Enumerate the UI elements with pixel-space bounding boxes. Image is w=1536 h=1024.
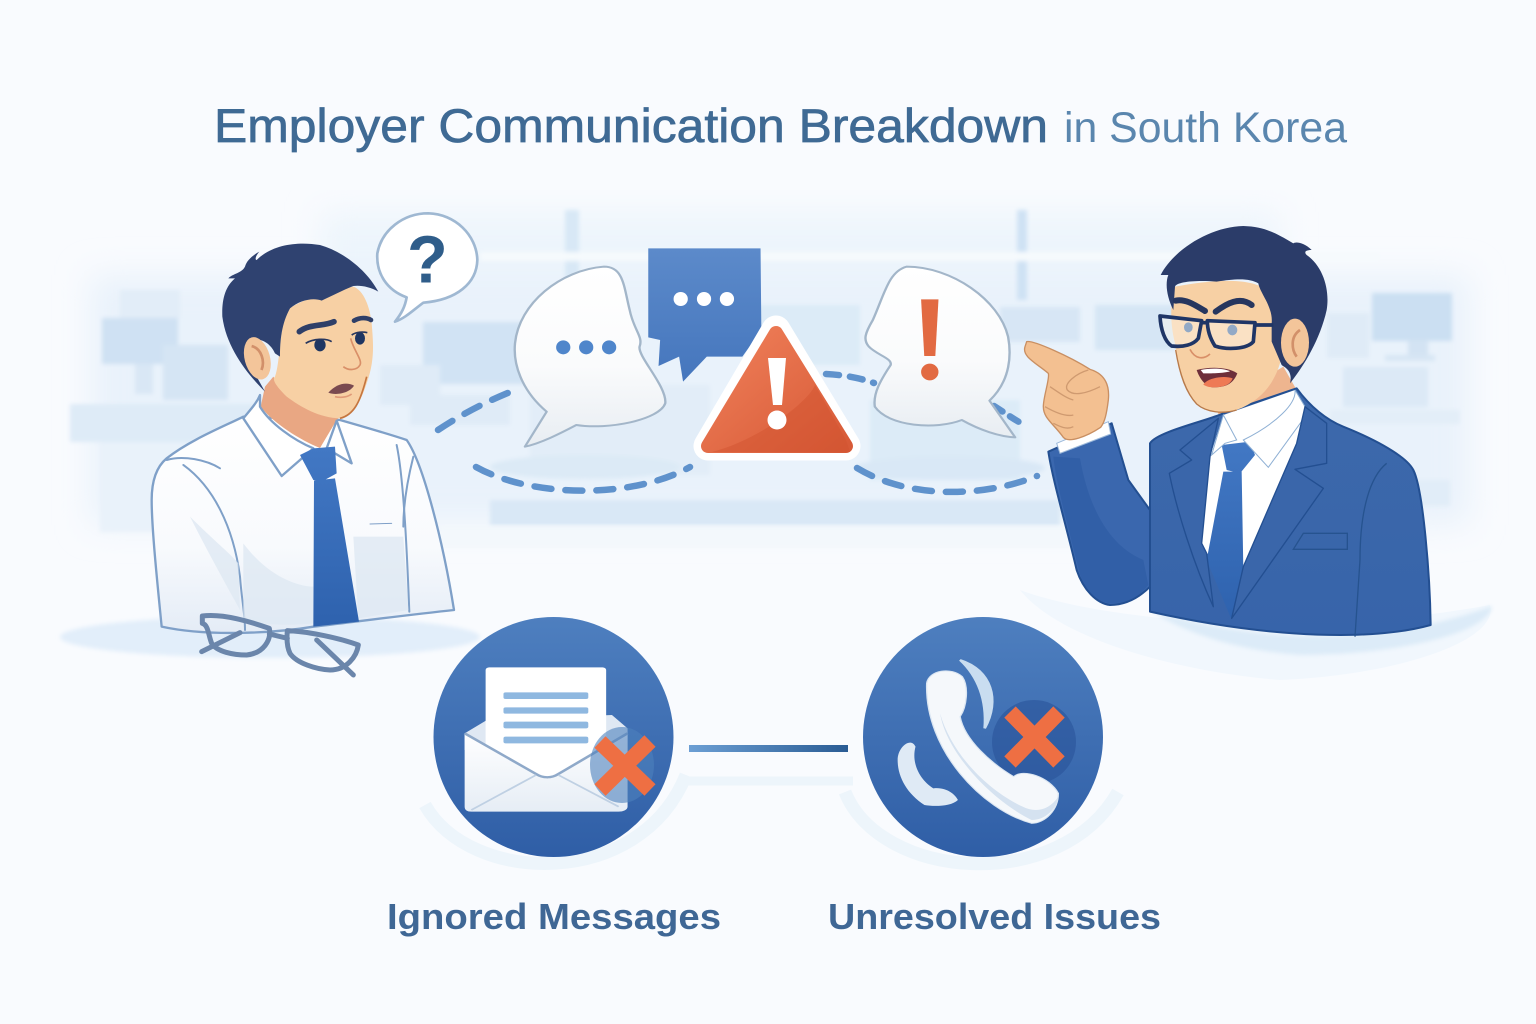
label: unresolved issues: Unresolved Issues: [828, 896, 1161, 937]
character: confused employee: [152, 244, 454, 633]
collar: [243, 395, 352, 476]
character: angry manager: [1025, 226, 1431, 637]
title: Employer Communication Breakdown: [214, 99, 1048, 152]
hair: [1161, 226, 1327, 383]
desk shadow: left: [60, 616, 480, 658]
facial features: [1176, 300, 1252, 387]
speech bubble: white dots: [515, 267, 665, 447]
ear: [239, 334, 275, 383]
neck: [261, 377, 343, 448]
title: in South Korea: [1064, 104, 1347, 152]
suit pocket and seam: [1293, 463, 1387, 637]
collar: [1212, 390, 1305, 467]
shirt: [152, 417, 454, 633]
tie: [1207, 442, 1255, 620]
hair: [222, 244, 378, 392]
shirt shading: [190, 517, 408, 625]
title: [214, 99, 1347, 152]
icon: ignored message: [434, 617, 674, 857]
rings under icons: [425, 775, 1118, 864]
envelope front: [465, 733, 628, 812]
desk shadow: right: [1020, 590, 1492, 680]
speech bubble: exclamation: [865, 267, 1015, 437]
icon: failed phone call: [863, 617, 1103, 857]
face: [1171, 281, 1282, 412]
warning triangle: [708, 330, 850, 452]
finger folds: [1045, 370, 1100, 428]
connector line: [689, 745, 848, 752]
speech bubble: question: [377, 213, 477, 322]
facial features: [299, 318, 371, 397]
suit body: [1150, 388, 1431, 635]
dashed connection lines: [438, 374, 1037, 492]
label: ignored messages: Ignored Messages: [387, 896, 721, 937]
pointing hand: [1025, 342, 1109, 440]
shirt creases: [167, 445, 413, 630]
envelope back: [465, 715, 628, 750]
eyeglasses: [1160, 316, 1273, 348]
glasses on desk: [202, 615, 358, 675]
tie: [300, 447, 359, 627]
right lapel: [1232, 407, 1327, 618]
speech bubble: dark blue dots: [648, 248, 761, 382]
face: [274, 287, 373, 418]
sleeve shading: [1053, 457, 1148, 603]
neck: [1217, 367, 1297, 437]
cuff: [1057, 422, 1111, 453]
left lapel: [1169, 418, 1218, 607]
blurred office background: [70, 210, 1470, 548]
ear: [1281, 319, 1309, 367]
speech bubble: question: ?: [407, 224, 448, 298]
sleeve: [1048, 423, 1150, 605]
shirt front: [1202, 390, 1305, 567]
